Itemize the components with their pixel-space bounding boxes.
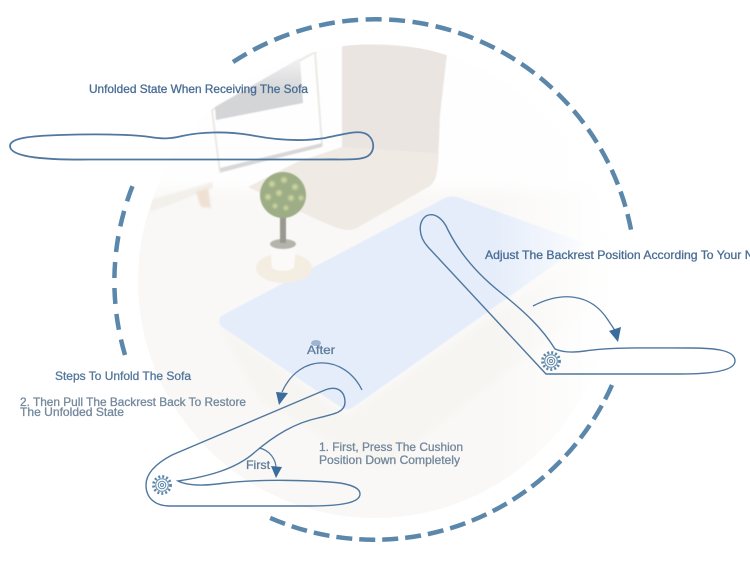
folding chair bbox=[248, 44, 447, 230]
arrow: first bbox=[259, 448, 282, 478]
label: first: First bbox=[246, 458, 271, 472]
icon: gear hinge right bbox=[542, 352, 560, 370]
cushion bbox=[219, 196, 585, 410]
text: step 1: 1. First, Press The Cushion bbox=[319, 440, 463, 454]
dashed circular ring bbox=[114, 19, 632, 540]
icon: small dot above After bbox=[311, 340, 321, 346]
label: unfolded state: Unfolded State When Receiving The Sofa bbox=[89, 82, 308, 96]
shadow under cushion bbox=[218, 245, 600, 470]
label: after: After bbox=[307, 343, 335, 357]
poster frame bbox=[212, 52, 322, 172]
flat sofa outline bbox=[10, 132, 373, 160]
text: step 2: 2. Then Pull The Backrest Back To Restore bbox=[20, 395, 246, 409]
arrow: after bbox=[276, 363, 362, 405]
arrow: backrest adjustment bbox=[533, 297, 621, 342]
faded circular room photo bbox=[138, 44, 570, 518]
text: step 1 bbox=[319, 440, 463, 467]
TV stand leg bbox=[150, 182, 213, 212]
potted plant bbox=[256, 172, 312, 283]
text: step 2: The Unfolded State bbox=[20, 405, 124, 419]
icon: gear hinge left bbox=[154, 476, 170, 494]
label: steps to unfold: Steps To Unfold The Sofa bbox=[55, 369, 191, 383]
reclined sofa outline bbox=[420, 215, 735, 374]
text: step 2 bbox=[20, 395, 246, 419]
text: step 1: Position Down Completely bbox=[319, 453, 460, 467]
folded sofa outline bbox=[146, 388, 360, 506]
